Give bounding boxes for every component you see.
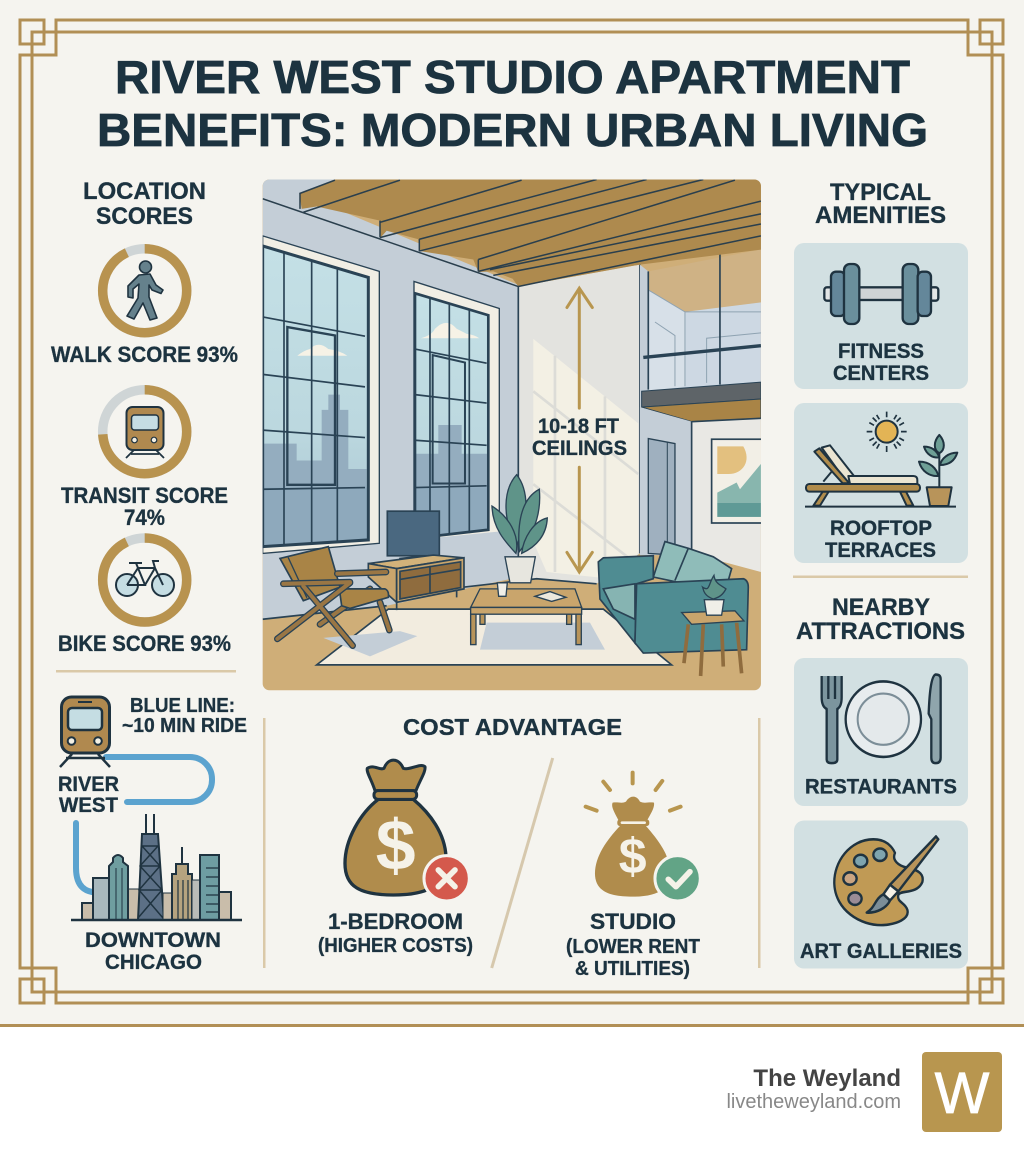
panel: apartment interior illustration xyxy=(262,180,761,690)
downtown chicago label: DOWNTOWN xyxy=(85,929,221,952)
logo: W badge: W xyxy=(935,1061,990,1126)
icon: chicago skyline xyxy=(71,814,242,920)
panel: location scores xyxy=(51,178,238,656)
icon: studio money bag with green check xyxy=(586,773,700,901)
icon: studio money bag with green check: $ xyxy=(619,828,647,884)
downtown chicago label: CHICAGO xyxy=(105,951,202,974)
transit score label: 74% xyxy=(124,505,165,530)
card: art galleries xyxy=(794,820,968,968)
icon: one-bedroom money bag with red cross: $ xyxy=(376,805,416,885)
bike score donut and icon xyxy=(103,538,187,622)
blue line label: BLUE LINE: xyxy=(130,694,235,717)
transit score label xyxy=(61,483,228,530)
heading: typical amenities: TYPICAL xyxy=(830,179,931,206)
river west label: RIVER xyxy=(58,773,119,796)
cost advantage heading: COST ADVANTAGE xyxy=(403,714,622,740)
walk score label: WALK SCORE 93% xyxy=(51,342,238,367)
studio label: & UTILITIES) xyxy=(575,958,690,980)
walk score donut and icon xyxy=(103,249,187,333)
blue line route xyxy=(76,757,212,892)
restaurants label: RESTAURANTS xyxy=(805,776,957,798)
icon: fork plate and knife xyxy=(822,675,941,763)
panel: nearby attractions xyxy=(794,594,968,968)
icon: dumbbell xyxy=(824,264,938,324)
potted plant xyxy=(491,474,548,584)
heading: location scores: LOCATION xyxy=(83,178,206,205)
card: restaurants xyxy=(794,658,968,806)
one-bedroom label xyxy=(318,909,473,957)
mezzanine xyxy=(640,249,761,572)
panel: cost advantage xyxy=(263,714,760,980)
heading: nearby attractions: ATTRACTIONS xyxy=(796,618,965,645)
back wall with sunlight xyxy=(518,265,640,584)
heading: location scores: SCORES xyxy=(96,203,193,230)
ceiling height label: CEILINGS xyxy=(532,437,627,460)
card: rooftop terraces xyxy=(794,403,968,563)
right window xyxy=(414,281,499,542)
coffee table xyxy=(471,583,582,645)
blue line label xyxy=(122,694,247,737)
icon: sun and lounger with plant xyxy=(805,412,957,507)
rug xyxy=(317,609,672,665)
brand footer xyxy=(726,1052,1002,1132)
card: fitness centers xyxy=(794,243,968,389)
brand text xyxy=(726,1065,901,1113)
blue line label: ~10 MIN RIDE xyxy=(122,714,247,737)
rooftop terraces label xyxy=(825,517,936,562)
fitness centers label xyxy=(833,340,929,385)
ceiling height label xyxy=(532,415,627,460)
icon: one-bedroom money bag with red cross xyxy=(345,760,469,901)
transit score label: TRANSIT SCORE xyxy=(61,483,228,508)
logo: W badge xyxy=(922,1052,1002,1132)
heading: nearby attractions xyxy=(796,594,965,645)
fitness centers label: FITNESS xyxy=(838,340,924,363)
wall art xyxy=(712,439,765,523)
rooftop terraces label: TERRACES xyxy=(825,539,936,562)
wood ceiling beams xyxy=(263,179,763,287)
ceiling height arrow xyxy=(567,288,592,572)
title xyxy=(97,51,928,156)
studio label: (LOWER RENT xyxy=(566,936,700,958)
floor baseboard xyxy=(263,579,597,619)
title: BENEFITS: MODERN URBAN LIVING xyxy=(97,104,928,156)
title: RIVER WEST STUDIO APARTMENT xyxy=(115,51,910,103)
one-bedroom label: (HIGHER COSTS) xyxy=(318,935,473,957)
tv and console xyxy=(368,511,464,610)
icon: train xyxy=(60,697,110,767)
bike score label: BIKE SCORE 93% xyxy=(58,631,231,656)
icon: palette and brush xyxy=(834,836,938,925)
fitness centers label: CENTERS xyxy=(833,362,929,385)
brand text: The Weyland xyxy=(753,1065,901,1092)
one-bedroom label: 1-BEDROOM xyxy=(328,909,463,934)
heading: typical amenities xyxy=(815,179,946,229)
side table and small plant xyxy=(682,575,744,676)
heading: typical amenities: AMENITIES xyxy=(815,202,946,229)
river west label xyxy=(58,773,119,817)
downtown chicago label xyxy=(85,929,221,974)
brand text: livetheweyland.com xyxy=(726,1091,901,1113)
heading: nearby attractions: NEARBY xyxy=(832,594,930,621)
lounge chair xyxy=(277,547,389,646)
rooftop terraces label: ROOFTOP xyxy=(830,517,932,540)
left window xyxy=(263,236,379,553)
panel: typical amenities xyxy=(794,179,968,563)
panel: blue line commute xyxy=(58,694,247,974)
transit score donut and icon xyxy=(103,390,187,474)
left wall xyxy=(263,179,519,619)
ceiling height label: 10-18 FT xyxy=(538,415,619,438)
studio label xyxy=(566,909,700,980)
river west label: WEST xyxy=(59,794,118,817)
studio label: STUDIO xyxy=(590,909,676,934)
art galleries label: ART GALLERIES xyxy=(800,940,962,963)
sofa xyxy=(598,542,748,653)
heading: location scores xyxy=(83,178,206,230)
